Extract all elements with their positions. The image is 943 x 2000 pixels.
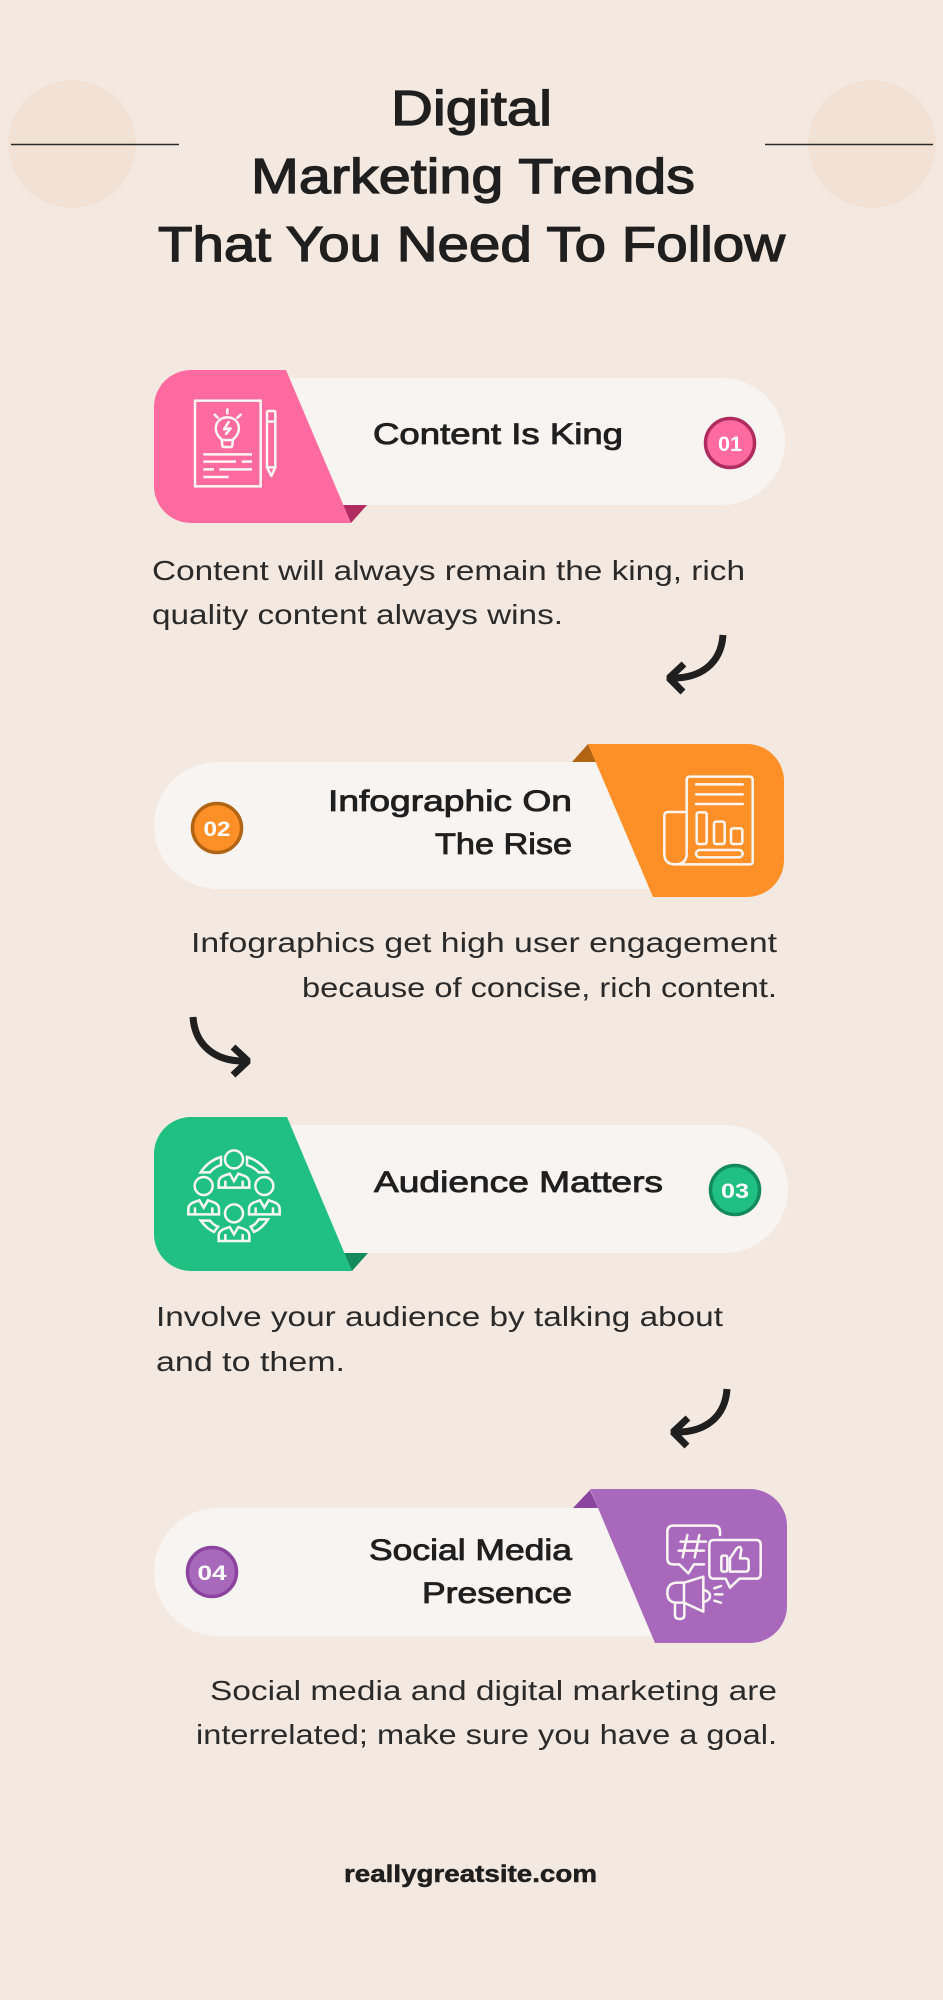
- ribbon fold: [344, 1253, 368, 1271]
- heading: Social Media: [369, 1534, 572, 1567]
- arrow 2: [193, 1017, 248, 1075]
- pill background: [154, 762, 754, 889]
- title: That You Need To Follow: [158, 218, 786, 272]
- decorative circle and line: right: [765, 80, 936, 208]
- arrow 1: [669, 635, 723, 692]
- description 3: Involve your audience by talking about: [156, 1301, 723, 1332]
- panel: infographic on the rise: [154, 744, 784, 897]
- heading: The Rise: [435, 828, 572, 861]
- number badge 03: [710, 1166, 760, 1214]
- heading: [328, 785, 572, 861]
- number badge 02: [192, 804, 242, 852]
- description 1: [152, 555, 745, 630]
- icon: document with light bulb and pencil: [195, 401, 275, 486]
- description 4: interrelated; make sure you have a goal.: [196, 1719, 777, 1750]
- colored tab: [588, 744, 784, 897]
- title: [158, 82, 786, 272]
- description 3: and to them.: [156, 1346, 345, 1377]
- ribbon fold: [572, 744, 596, 762]
- heading: Presence: [422, 1577, 572, 1610]
- heading: Audience Matters: [374, 1166, 663, 1199]
- icon: audience circle: [188, 1150, 280, 1241]
- title: Digital: [391, 82, 552, 136]
- footer website: reallygreatsite.com: [344, 1861, 597, 1888]
- icon: report with bar chart: [664, 777, 753, 864]
- pill background: [154, 1508, 754, 1636]
- panel: content is king: [154, 370, 785, 523]
- number badge 02: 02: [204, 818, 230, 841]
- arrow 3: [673, 1389, 727, 1446]
- description 2: [191, 927, 777, 1003]
- colored tab: [590, 1489, 787, 1643]
- colored tab: [154, 370, 351, 523]
- description 1: quality content always wins.: [152, 599, 563, 630]
- ribbon fold: [343, 505, 367, 523]
- panel: audience matters: [154, 1117, 788, 1271]
- pill background: [154, 1125, 788, 1253]
- description 2: because of concise, rich content.: [302, 972, 777, 1003]
- number badge 04: [188, 1548, 236, 1596]
- description 3: [156, 1301, 723, 1377]
- description 1: Content will always remain the king, rich: [152, 555, 745, 586]
- description 4: Social media and digital marketing are: [210, 1675, 777, 1706]
- pill background: [154, 378, 785, 505]
- number badge 03: 03: [721, 1180, 749, 1203]
- panel: social media presence: [154, 1489, 787, 1643]
- description 4: [196, 1675, 777, 1750]
- colored tab: [154, 1117, 352, 1271]
- ribbon fold: [573, 1490, 598, 1508]
- description 2: Infographics get high user engagement: [191, 927, 777, 958]
- title: Marketing Trends: [251, 150, 695, 204]
- heading: [369, 1534, 572, 1610]
- number badge 01: 01: [718, 433, 742, 456]
- decorative circle and line: left: [8, 80, 179, 208]
- heading: Content Is King: [373, 418, 623, 451]
- number badge 01: [706, 418, 754, 468]
- icon: social media bubbles and megaphone: [667, 1526, 761, 1619]
- heading: Infographic On: [328, 785, 572, 818]
- number badge 04: 04: [198, 1562, 227, 1585]
